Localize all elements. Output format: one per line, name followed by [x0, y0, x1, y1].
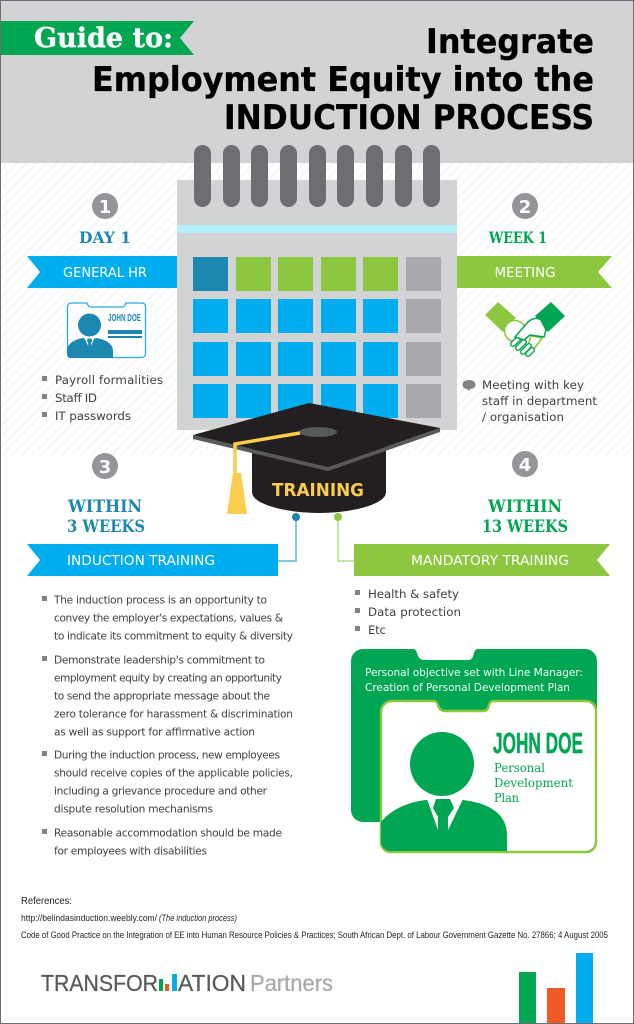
- text block: induction notes: for employees with disabilities: [54, 846, 207, 858]
- step 2 number: [512, 193, 538, 219]
- title: Integrate: [426, 22, 594, 61]
- text block: induction notes: zero tolerance for harassment & discrimination: [54, 708, 293, 720]
- text block: induction notes: [42, 594, 293, 858]
- banner: Guide to: Guide to:: [34, 23, 173, 54]
- list: mandatory training: [355, 587, 461, 637]
- step 1 heading: DAY 1: [79, 228, 131, 247]
- banner: meeting: MEETING: [494, 265, 556, 281]
- text block: induction notes: should receive copies of the applicable policies,: [54, 768, 293, 780]
- step 2 heading: WEEK 1: [488, 228, 547, 247]
- list: general HR: Staff ID: [55, 391, 97, 405]
- icon: ID card: JOHN DOE: [108, 313, 141, 324]
- card subtitle: Development: [494, 776, 573, 790]
- text block: induction notes: Demonstrate leadership's commitment to: [54, 654, 265, 666]
- step 4 number: [512, 451, 538, 477]
- bar chart decoration: [519, 953, 593, 1024]
- list: mandatory training: Health & safety: [368, 587, 459, 601]
- banner: Guide to: [0, 21, 194, 55]
- icon: speech bubble: [462, 380, 476, 391]
- meeting note: staff in department: [482, 394, 597, 408]
- step 4 number: 4: [519, 455, 531, 476]
- title: Employment Equity into the: [92, 60, 594, 99]
- icon: handshake: [485, 302, 565, 354]
- card subtitle: [494, 761, 573, 805]
- step 4 heading: 13 WEEKS: [482, 517, 568, 537]
- card back: [351, 649, 597, 822]
- list: general HR: Payroll formalities: [55, 373, 163, 387]
- text block: induction notes: including a grievance procedure and other: [54, 786, 268, 798]
- references: (The induction process): [159, 913, 237, 923]
- step 3 number: [92, 453, 118, 479]
- step 3 heading: WITHIN: [67, 497, 142, 517]
- calendar rings: [194, 145, 440, 207]
- list: mandatory training: Data protection: [368, 605, 461, 619]
- meeting note: / organisation: [482, 410, 564, 424]
- text block: induction notes: The induction process is an opportunity to: [53, 594, 267, 606]
- banner: meeting: [457, 256, 612, 288]
- banner: general HR: [27, 256, 177, 288]
- text block: induction notes: to indicate its commitment to equity & diversity: [54, 630, 293, 642]
- text block: induction notes: During the induction process, new employees: [54, 750, 280, 762]
- text block: induction notes: dispute resolution mechanisms: [54, 804, 213, 816]
- text block: induction notes: convey the employer's expectations, values &: [54, 612, 283, 624]
- logo: Transformation Partners: Partners: [250, 970, 333, 996]
- card subtitle: Plan: [494, 791, 519, 805]
- card subtitle: Personal: [494, 761, 545, 775]
- text block: induction notes: as well as support for affirmative action: [54, 726, 255, 738]
- step 4 heading: WITHIN: [487, 497, 562, 517]
- step 3 heading: [67, 497, 145, 537]
- step 3 number: 3: [99, 457, 111, 478]
- banner: general HR: GENERAL HR: [63, 265, 147, 281]
- banner: mandatory training: [354, 544, 610, 576]
- card front: [381, 701, 596, 852]
- banner: mandatory training: MANDATORY TRAINING: [411, 553, 569, 569]
- text block: induction notes: Reasonable accommodation should be made: [54, 828, 282, 840]
- logo: Transformation Partners: [41, 970, 333, 996]
- meeting note: [462, 378, 597, 424]
- icon: ID card: [67, 303, 146, 358]
- step 3 heading: 3 WEEKS: [67, 517, 145, 537]
- title: [92, 22, 594, 137]
- step 4 heading: [482, 497, 568, 537]
- list: mandatory training: Etc: [368, 623, 386, 637]
- cap label: TRAINING: [272, 480, 364, 501]
- panel: personal development plan: [351, 649, 597, 852]
- header background: [0, 0, 634, 163]
- card back text: Creation of Personal Development Plan: [365, 682, 570, 694]
- icon: graduation cap: [193, 403, 440, 514]
- text block: induction notes: to send the appropriate message about the: [54, 690, 270, 702]
- logo: Transformation Partners: TRANSFOR: [41, 970, 158, 996]
- title: INDUCTION PROCESS: [224, 98, 594, 137]
- text block: induction notes: employment equity by creating an opportunity: [54, 672, 282, 684]
- card back text: Personal objective set with Line Manager:: [365, 667, 583, 679]
- list: general HR: IT passwords: [55, 409, 131, 423]
- connector: mandatory training: [334, 513, 354, 561]
- connector: induction training: [278, 513, 300, 561]
- banner: induction training: INDUCTION TRAINING: [67, 553, 215, 569]
- person icon: [381, 732, 507, 851]
- logo: Transformation Partners: ATION: [178, 970, 246, 996]
- references: References:: [21, 895, 72, 907]
- step 2 number: 2: [519, 197, 531, 218]
- card back text: [365, 667, 583, 694]
- calendar: [177, 145, 457, 430]
- list: general HR: [42, 373, 163, 423]
- calendar cells: [193, 257, 441, 418]
- step 1 number: [92, 193, 118, 219]
- step 1 number: 1: [99, 197, 111, 218]
- banner: induction training: [27, 544, 278, 576]
- references: [21, 895, 608, 940]
- references: http://belindasinduction.weebly.com/: [21, 913, 157, 923]
- meeting note: Meeting with key: [482, 378, 584, 392]
